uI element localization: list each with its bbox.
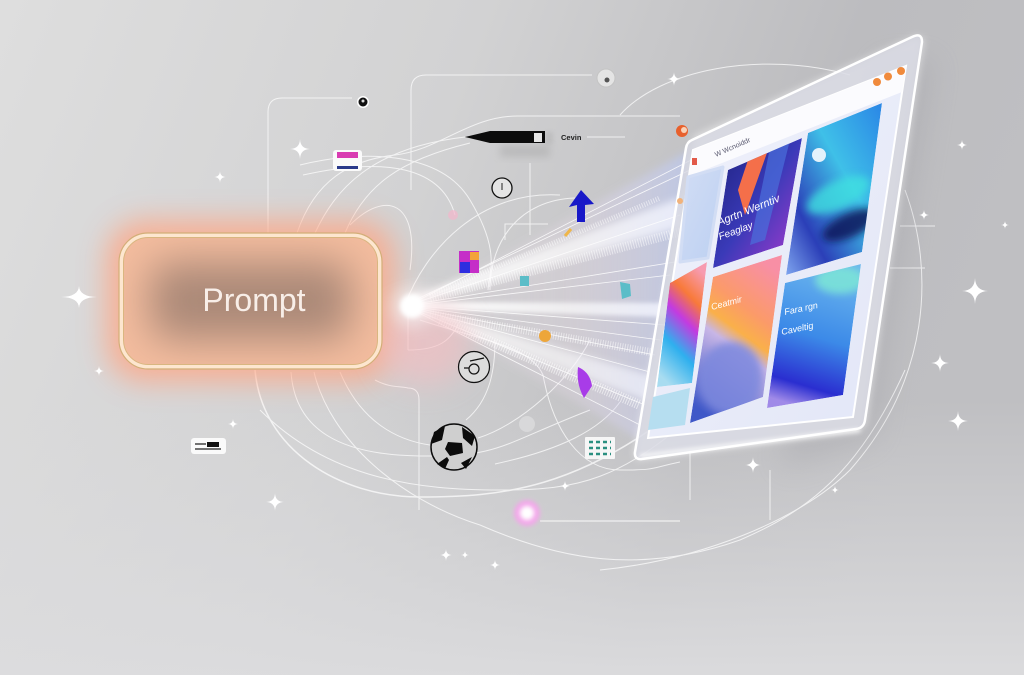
connector lines and orbit curves	[255, 64, 935, 570]
icon: circled glyph	[458, 352, 490, 382]
inner shading	[150, 262, 351, 340]
glowing origin point	[392, 286, 432, 326]
card: left bottom	[648, 388, 690, 430]
card: blue: Caveltig	[780, 320, 814, 337]
icon: pink orb	[514, 500, 540, 526]
window dots	[873, 67, 905, 86]
orange data orbs	[539, 125, 688, 342]
bottom edge highlight	[640, 430, 860, 456]
card: pink orange waves: Ceatmir	[710, 294, 744, 312]
card: blue	[767, 264, 865, 408]
icon: pale circle	[519, 416, 535, 432]
card: blue waves	[786, 103, 882, 275]
inner panel	[648, 66, 906, 438]
icon: purple gem	[578, 367, 592, 398]
card: pink orange waves	[690, 255, 782, 423]
tablet screen	[634, 35, 935, 470]
icon: ball	[431, 424, 477, 470]
card: left colourful	[657, 262, 707, 387]
icon: black dot	[357, 96, 369, 108]
card: blue: Fara rgn	[783, 300, 819, 317]
prompt label: Prompt	[202, 282, 306, 318]
prompt box	[119, 233, 382, 369]
icon: teal chips	[520, 276, 631, 299]
icon: pen	[465, 131, 553, 157]
sparkles	[61, 72, 1009, 570]
icon: text card	[191, 438, 226, 454]
icon: yellow mark	[565, 229, 571, 236]
card: dark gradient	[713, 138, 802, 268]
data beam from prompt to screen	[410, 150, 695, 440]
icon: colour square	[459, 251, 479, 273]
card: left top	[680, 167, 723, 262]
prompt glow	[106, 220, 470, 385]
icon: blue arrow	[569, 190, 594, 222]
icon: pink spark	[448, 210, 458, 220]
icon: card	[333, 150, 362, 171]
icon: grid card	[585, 437, 615, 459]
icon: clock	[492, 178, 512, 198]
card: dark gradient: Feaglay	[717, 220, 755, 243]
icon label: Cevin	[561, 133, 582, 142]
icon: camera	[597, 69, 615, 87]
header text: W Wcnoiddr	[714, 137, 752, 159]
card: dark gradient: Agrtn Werntiv	[715, 192, 783, 229]
